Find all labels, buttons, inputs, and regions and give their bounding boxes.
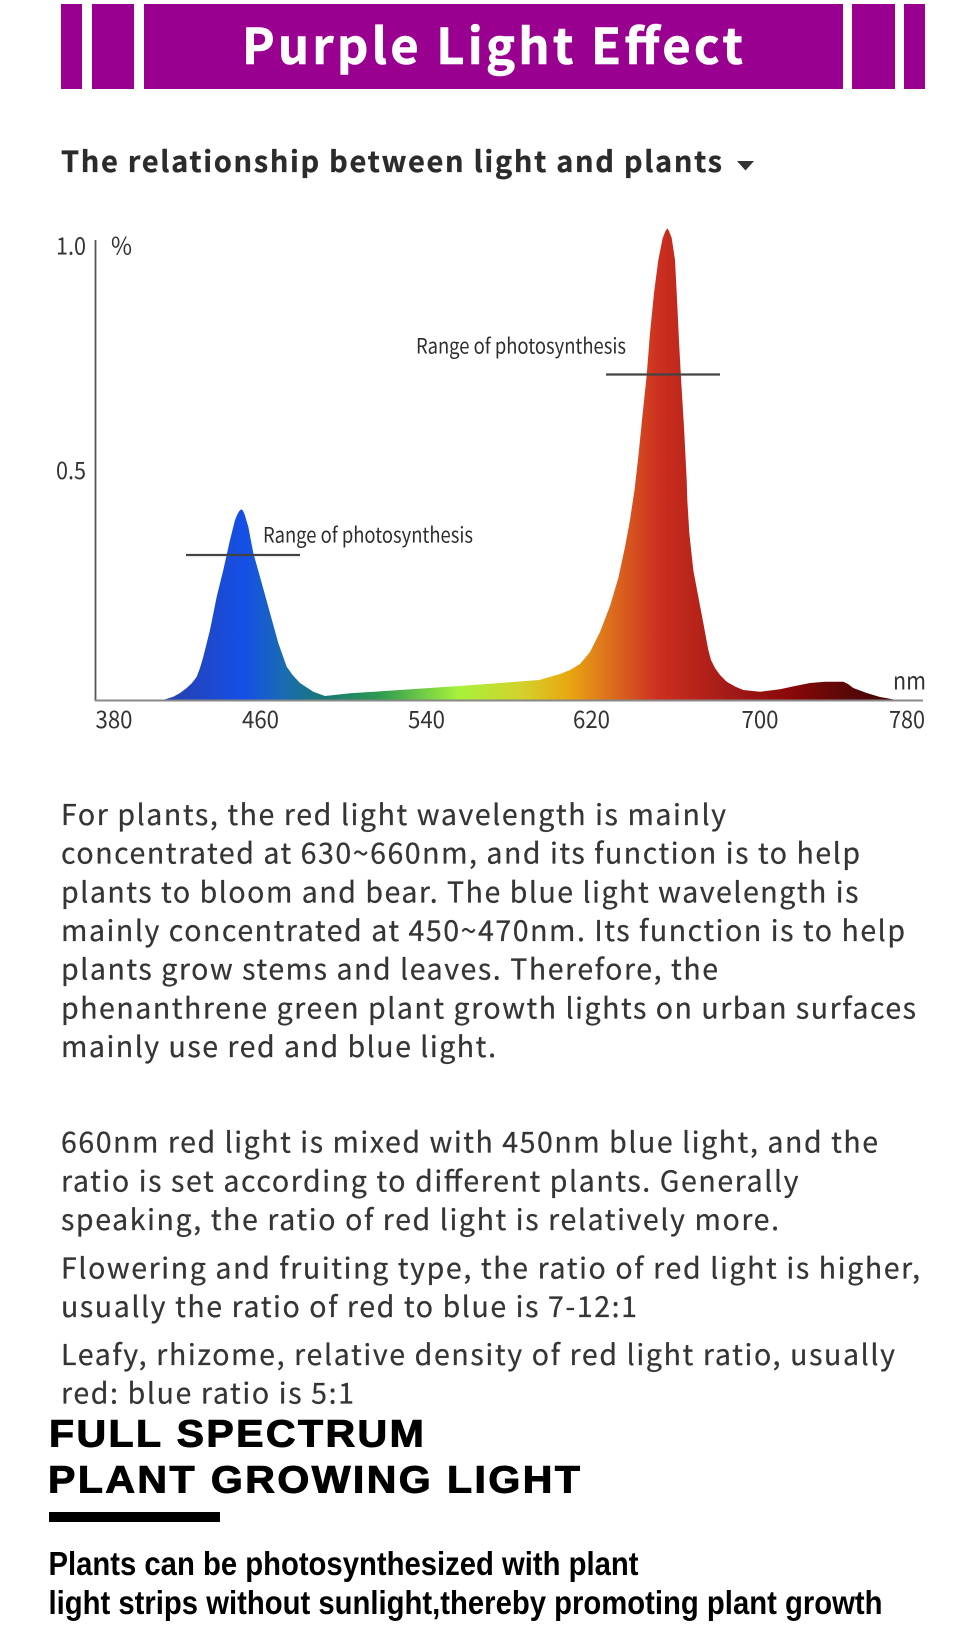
paragraph: mix ratio xyxy=(61,1121,878,1239)
banner main bar xyxy=(144,4,843,89)
paragraph: red and blue wavelengths: concentrated at 630~660nm, and its function is to help xyxy=(61,832,860,873)
icon: down triangle xyxy=(737,161,754,170)
x axis xyxy=(95,700,923,702)
y axis label 1.0: 1.0 xyxy=(56,226,86,262)
heading: full spectrum plant growing light: PLANT GROWING LIGHT xyxy=(48,1459,580,1501)
x axis ticks xyxy=(96,700,925,735)
paragraph: red and blue wavelengths: mainly concentrated at 450~470nm. Its function is to help xyxy=(61,909,905,950)
heading underline bar xyxy=(49,1512,220,1522)
subheading text: The relationship between light and plants xyxy=(61,139,722,181)
banner stripes left xyxy=(61,4,134,89)
paragraph: leafy and rhizome: red: blue ratio is 5:1 xyxy=(61,1371,354,1412)
y axis xyxy=(94,240,96,701)
banner stripes right xyxy=(852,4,925,89)
subheading xyxy=(61,139,754,181)
caption xyxy=(48,1545,882,1621)
paragraph: leafy and rhizome xyxy=(61,1333,895,1412)
spectrum chart xyxy=(56,226,926,735)
x axis ticks: 620 xyxy=(573,700,610,735)
paragraph: flowering and fruiting: Flowering and fruiting type, the ratio of red light is higher, xyxy=(61,1246,920,1287)
paragraph: red and blue wavelengths: plants grow stems and leaves. Therefore, the xyxy=(61,948,718,989)
x axis ticks: 460 xyxy=(242,700,279,735)
x axis ticks: 380 xyxy=(96,700,132,735)
y axis label 0.5: 0.5 xyxy=(56,451,86,486)
x axis ticks: 540 xyxy=(408,700,445,735)
heading: full spectrum plant growing light xyxy=(48,1413,580,1501)
title banner xyxy=(61,4,925,89)
paragraph: leafy and rhizome: Leafy, rhizome, relative density of red light ratio, usually xyxy=(61,1333,895,1374)
callout: red peak: Range of photosynthesis xyxy=(416,330,626,360)
paragraph: flowering and fruiting: usually the ratio of red to blue is 7-12:1 xyxy=(61,1285,637,1326)
heading: full spectrum plant growing light: FULL SPECTRUM xyxy=(49,1413,424,1455)
x axis unit: nm xyxy=(893,662,926,696)
paragraph: mix ratio: speaking, the ratio of red light is relatively more. xyxy=(61,1198,779,1239)
x axis ticks: 700 xyxy=(742,700,778,735)
spectrum curve xyxy=(160,228,897,700)
paragraph: red and blue wavelengths: mainly use red and blue light. xyxy=(61,1025,496,1066)
paragraph: flowering and fruiting xyxy=(61,1246,920,1326)
caption: Plants can be photosynthesized with plant xyxy=(48,1545,639,1582)
paragraph: red and blue wavelengths: For plants, the red light wavelength is mainly xyxy=(61,793,726,834)
paragraph: mix ratio: 660nm red light is mixed with 450nm blue light, and the xyxy=(61,1121,878,1162)
paragraph: red and blue wavelengths: plants to bloom and bear. The blue light wavelength is xyxy=(61,870,858,911)
callout: blue peak: Range of photosynthesis xyxy=(263,520,473,550)
paragraph: mix ratio: ratio is set according to different plants. Generally xyxy=(61,1159,799,1200)
title text: Purple Light Effect xyxy=(242,8,743,79)
x axis ticks: 780 xyxy=(889,700,925,735)
paragraph: red and blue wavelengths: phenanthrene green plant growth lights on urban surfaces xyxy=(61,986,916,1027)
paragraph: red and blue wavelengths xyxy=(61,793,916,1066)
y axis unit: % xyxy=(111,226,132,262)
